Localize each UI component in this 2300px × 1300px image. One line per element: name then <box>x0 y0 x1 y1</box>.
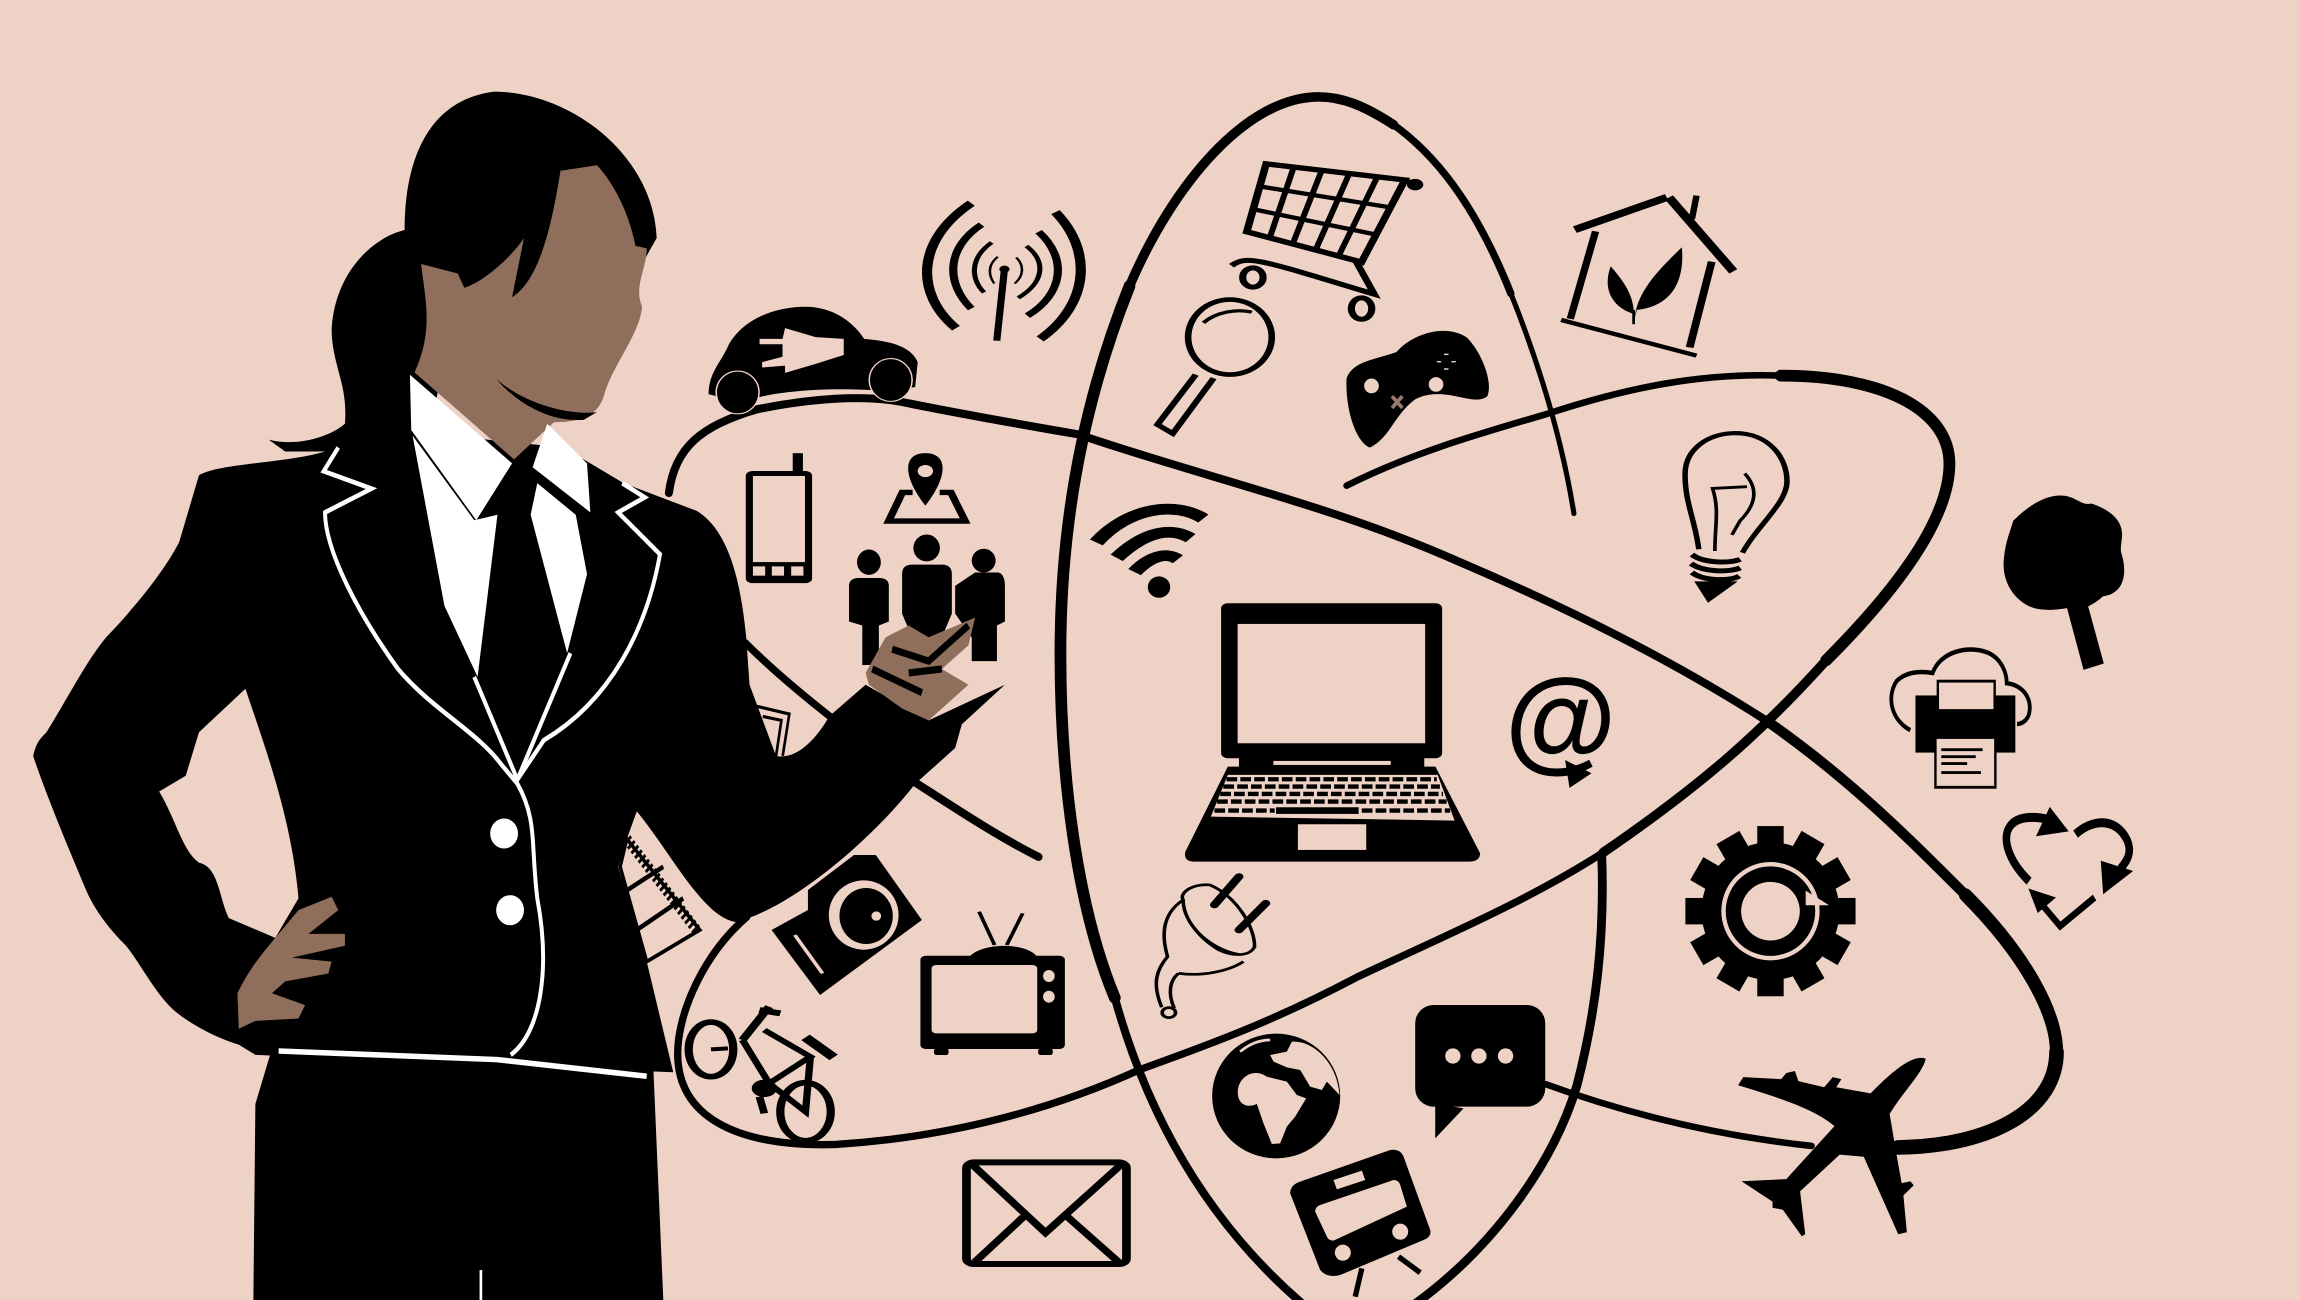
icon: envelope <box>966 1162 1126 1264</box>
icon: mobile phone <box>749 453 809 581</box>
icon: globe <box>1212 1034 1340 1158</box>
hair <box>269 92 657 455</box>
icon: broadcast antenna <box>927 203 1081 341</box>
icon: tree <box>2004 495 2124 670</box>
icon: train <box>1290 1150 1430 1297</box>
face and neck <box>415 165 647 459</box>
icon: bicycle <box>689 1007 834 1141</box>
icon: film strip <box>620 839 700 962</box>
icon: tablet fragment <box>756 706 789 756</box>
icon: cloud printer <box>1891 649 2030 787</box>
icon: airplane <box>1738 1058 1926 1236</box>
icon: eco house <box>1561 196 1733 356</box>
icon: map pin <box>889 453 965 521</box>
icon: laptop <box>1185 603 1480 862</box>
jaw line <box>496 379 597 420</box>
icon: chat bubble <box>1415 1005 1545 1138</box>
icon: at sign: @ <box>1505 656 1616 784</box>
hand on hip <box>237 897 345 1029</box>
orbit: diagonal ellipse ascending right <box>678 375 1949 1145</box>
icon: light bulb <box>1685 433 1787 603</box>
woman in business suit <box>33 92 1005 1300</box>
jacket buttons <box>490 818 524 925</box>
jacket lapel piping <box>279 448 660 1300</box>
icon: shopping cart <box>1231 164 1423 319</box>
raised hand <box>866 618 975 720</box>
icon: game controller <box>1346 331 1489 448</box>
icon: television <box>920 912 1065 1055</box>
jacket <box>33 432 1005 1072</box>
gap between arm and waist <box>159 689 298 938</box>
icon: camera <box>772 855 922 995</box>
raised hand finger lines <box>872 625 968 693</box>
orbit: diagonal ellipse descending right <box>669 398 2057 1147</box>
orbit: vertical ellipse <box>1060 97 1602 1300</box>
trousers <box>253 1049 663 1300</box>
icon: group of people <box>849 535 1005 665</box>
icon: wifi <box>1096 509 1203 598</box>
icon: gear <box>1685 826 1856 996</box>
icon: electric car <box>709 307 918 414</box>
shirt and collar <box>410 375 590 677</box>
icon: power plug <box>1156 877 1266 1018</box>
icon: magnifying glass <box>1157 300 1272 434</box>
icon: recycling heart <box>2006 807 2133 926</box>
